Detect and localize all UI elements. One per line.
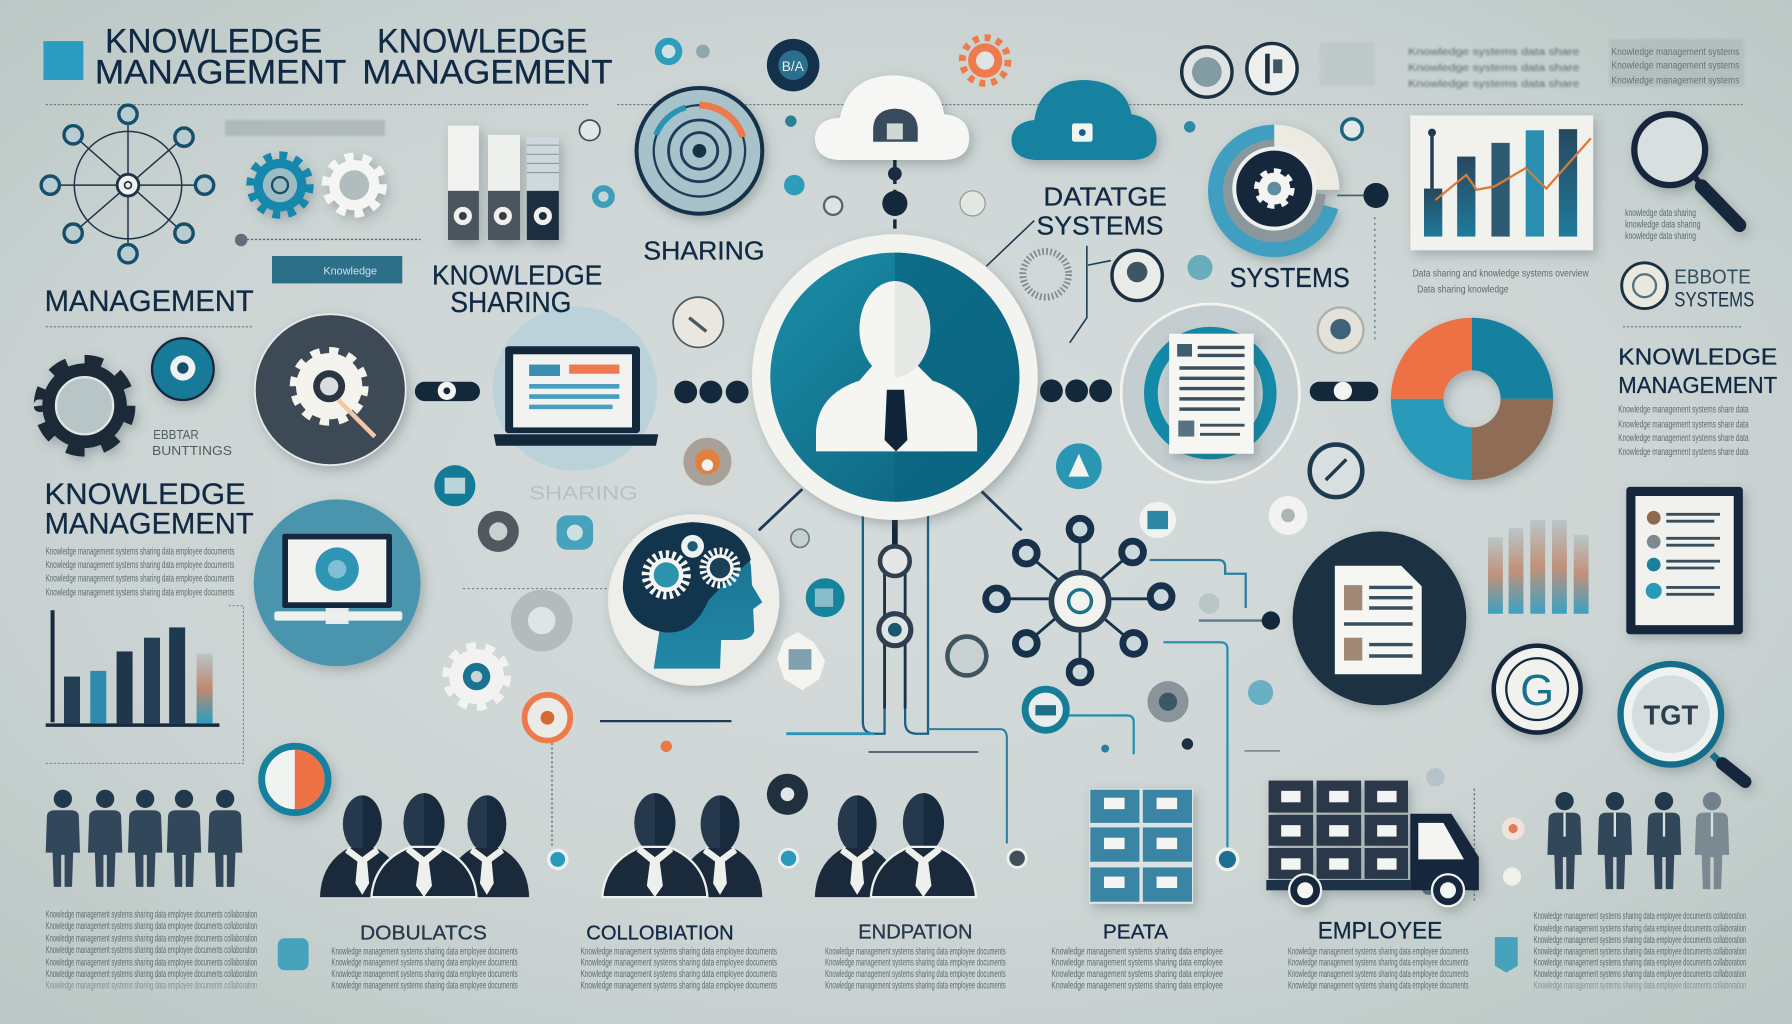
bottom text blocks	[46, 910, 1746, 992]
connector dots under cloud	[882, 160, 907, 234]
ring C badge	[1494, 646, 1581, 733]
text block 3: Knowledge management systems sharing data employee documents	[581, 946, 777, 957]
heading: systems: SYSTEMS	[1230, 262, 1350, 293]
text block 2: Knowledge management systems sharing data employee documents	[331, 969, 518, 980]
magnifier caption	[1625, 208, 1701, 242]
text block 3: Knowledge management systems sharing data employee documents	[581, 981, 777, 992]
small bar chart left	[46, 606, 243, 763]
pin icon	[235, 234, 247, 246]
text block left	[46, 546, 234, 598]
heading: sharing: SHARING	[643, 235, 765, 265]
head gears	[646, 535, 737, 595]
heading: knowledge management left	[45, 478, 254, 541]
faded header text blocks: Knowledge management systems	[1611, 75, 1739, 86]
small badges below center	[661, 307, 1363, 753]
team group 1	[320, 793, 529, 897]
teal gear	[251, 157, 309, 214]
ebbote systems badge	[1622, 263, 1754, 311]
text block 1: Knowledge management systems sharing data employee documents collaboration	[46, 945, 257, 956]
network wheel icon	[41, 105, 214, 263]
magnifier caption: knowledge data sharing	[1625, 231, 1696, 242]
text block 6	[1288, 946, 1469, 992]
magnifier bottom right: TGT	[1643, 700, 1699, 731]
text block 1	[46, 910, 257, 992]
heading: datatge systems: DATATGE	[1043, 182, 1167, 212]
faded small label	[152, 428, 232, 458]
text block 2: Knowledge management systems sharing data employee documents	[331, 981, 518, 992]
label chip	[272, 256, 402, 283]
monitor circle	[254, 499, 421, 666]
label: collobiation: COLLOBIATION	[586, 921, 734, 944]
title text right: MANAGEMENT	[362, 53, 613, 91]
heading: knowledge sharing	[432, 260, 602, 319]
bar chart card	[1410, 115, 1593, 250]
heading: knowledge management left: MANAGEMENT	[45, 508, 254, 541]
label: dobulatcs: DOBULATCS	[360, 921, 487, 944]
text block 5	[1051, 946, 1223, 992]
text block 4: Knowledge management systems sharing data employee documents	[825, 958, 1006, 969]
dark doc circle	[1293, 531, 1466, 705]
white gear	[327, 158, 382, 213]
heading: knowledge management right: KNOWLEDGE	[1618, 344, 1777, 370]
small badges top: B/A	[782, 59, 805, 74]
connector dots row	[415, 379, 1378, 403]
laptop	[493, 306, 658, 471]
people row left	[46, 790, 242, 887]
faded banner	[225, 120, 385, 136]
faded small label: BUNTTINGS	[152, 444, 232, 458]
text block left: Knowledge management systems sharing data employee documents	[46, 546, 234, 557]
text block 6: Knowledge management systems sharing data employee documents	[1288, 958, 1469, 969]
dot connector	[1262, 611, 1280, 630]
text block right	[1618, 405, 1749, 458]
faded header text blocks: Knowledge systems data share	[1408, 47, 1580, 58]
network hub	[986, 518, 1172, 683]
text block 5: Knowledge management systems sharing data employee	[1051, 981, 1223, 992]
title text left: KNOWLEDGE	[105, 23, 322, 61]
person silhouette	[816, 281, 977, 451]
text block left: Knowledge management systems sharing data employee documents	[46, 574, 234, 585]
bottom labels	[360, 917, 1442, 944]
dark gear icon left	[40, 361, 129, 450]
title text left: MANAGEMENT	[95, 53, 346, 91]
faded header text blocks: Knowledge systems data share	[1408, 63, 1580, 74]
ebbote systems badge: SYSTEMS	[1674, 286, 1754, 311]
team group 2	[602, 793, 762, 897]
magnifier bottom right	[1621, 664, 1745, 782]
title square	[43, 41, 83, 80]
connector lines below center	[463, 489, 1474, 903]
gear circle tool	[255, 314, 406, 465]
faded header text blocks: Knowledge management systems	[1611, 61, 1739, 72]
text block 3: Knowledge management systems sharing data employee documents	[581, 969, 777, 980]
text block 2	[331, 946, 518, 992]
ring C badge: G	[1520, 667, 1554, 715]
filing cabinet	[1089, 789, 1193, 904]
text block 4: Knowledge management systems sharing data employee documents	[825, 981, 1006, 992]
magnifier caption: knowledge data sharing	[1625, 219, 1701, 230]
team group 3	[815, 793, 976, 897]
text block 4: Knowledge management systems sharing data employee documents	[825, 946, 1006, 957]
chart caption: Data sharing and knowledge systems overview	[1413, 269, 1589, 280]
text block 4	[825, 946, 1006, 992]
text block 4: Knowledge management systems sharing data employee documents	[825, 969, 1006, 980]
faded bars	[1488, 520, 1589, 614]
magnifier caption: knowledge data sharing	[1625, 208, 1696, 219]
heading: management: MANAGEMENT	[45, 285, 254, 318]
gear donut	[1208, 125, 1339, 257]
head with gears	[608, 514, 779, 686]
chart caption: Data sharing knowledge	[1417, 285, 1509, 296]
small misc	[278, 768, 1525, 973]
connector to chart	[1337, 183, 1389, 343]
text block 6: Knowledge management systems sharing data employee documents	[1288, 969, 1469, 980]
heading: knowledge sharing: SHARING	[450, 287, 571, 319]
label: endpation: ENDPATION	[858, 920, 973, 943]
text block 2: Knowledge management systems sharing data employee documents	[331, 946, 518, 957]
label chip: Knowledge	[323, 265, 377, 277]
small badges top	[579, 38, 1362, 216]
chart caption	[1413, 269, 1589, 296]
heading: knowledge management right	[1618, 344, 1777, 398]
label: employee: EMPLOYEE	[1318, 917, 1442, 944]
faded header text blocks	[1320, 39, 1744, 90]
document circle	[1121, 304, 1299, 482]
text block 6: Knowledge management systems sharing data employee documents	[1288, 946, 1469, 957]
text block 1: Knowledge management systems sharing data employee documents collaboration	[46, 921, 257, 932]
text block 7	[1534, 911, 1746, 992]
people row right	[1547, 792, 1729, 889]
donut pie chart	[1391, 318, 1553, 480]
faded header text blocks: Knowledge systems data share	[1408, 79, 1580, 90]
text block 3: Knowledge management systems sharing data employee documents	[581, 958, 777, 969]
text block 6: Knowledge management systems sharing data employee documents	[1288, 981, 1469, 992]
gears pair	[251, 157, 382, 214]
text block left: Knowledge management systems sharing data employee documents	[46, 560, 234, 571]
text block 2: Knowledge management systems sharing data employee documents	[331, 958, 518, 969]
teal cloud	[1011, 80, 1157, 160]
badges near datatge	[1023, 250, 1213, 301]
text block 1: Knowledge management systems sharing data employee documents collaboration	[46, 958, 257, 969]
title	[43, 23, 613, 91]
faded sharing label: SHARING	[529, 482, 638, 504]
text block left: Knowledge management systems sharing data employee documents	[46, 587, 234, 598]
title text left	[95, 23, 346, 91]
binders	[448, 126, 559, 240]
heading: knowledge management right: MANAGEMENT	[1618, 372, 1777, 398]
faded header text blocks: Knowledge management systems	[1611, 47, 1739, 58]
teal badge	[152, 338, 214, 400]
heading: knowledge sharing: KNOWLEDGE	[432, 260, 602, 291]
text block 5: Knowledge management systems sharing data employee	[1051, 958, 1223, 969]
faded small label: EBBTAR	[153, 428, 199, 442]
title text right: KNOWLEDGE	[377, 23, 587, 61]
text block 3	[581, 946, 777, 992]
tablet checklist	[1626, 487, 1743, 634]
text block 5: Knowledge management systems sharing data employee	[1051, 946, 1223, 957]
ebbote systems badge: EBBOTE	[1674, 265, 1751, 288]
teal orange dial	[262, 746, 328, 813]
target icon	[637, 88, 762, 214]
central person medallion	[752, 234, 1038, 520]
white cloud	[815, 75, 969, 160]
text block 1: Knowledge management systems sharing data employee documents collaboration	[46, 934, 257, 945]
delivery truck	[1266, 781, 1479, 906]
text block 1: Knowledge management systems sharing data employee documents collaboration	[46, 969, 257, 980]
text block 1: Knowledge management systems sharing data employee documents collaboration	[46, 910, 257, 921]
text block 1: Knowledge management systems sharing data employee documents collaboration	[46, 981, 257, 992]
heading: datatge systems: SYSTEMS	[1037, 210, 1163, 240]
title text right	[362, 23, 613, 91]
small badges mid-left	[434, 297, 731, 741]
text block 5: Knowledge management systems sharing data employee	[1051, 969, 1223, 980]
heading: knowledge management left: KNOWLEDGE	[45, 478, 246, 511]
magnifier top right	[1634, 114, 1739, 225]
heading: datatge systems	[1037, 182, 1167, 240]
label: peata: PEATA	[1103, 920, 1168, 943]
